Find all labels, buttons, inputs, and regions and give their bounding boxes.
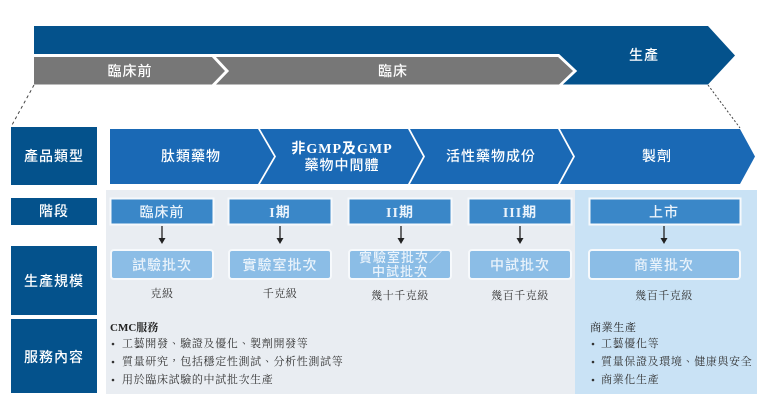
column: marketed bbox=[589, 198, 740, 302]
chevron: peptide drugs bbox=[110, 129, 274, 184]
clinical grey arrow bbox=[213, 57, 573, 84]
column: phase II bbox=[348, 198, 452, 302]
row label: stage bbox=[11, 198, 97, 225]
chevron: intermediates: 非GMP及GMP bbox=[291, 141, 393, 157]
column: phase III bbox=[468, 198, 572, 302]
chevron: formulation: 製劑 bbox=[642, 148, 672, 165]
dashed connector left bbox=[12, 85, 34, 125]
column: phase II: 中試批次 bbox=[372, 264, 428, 279]
panel: development stages background bbox=[106, 190, 575, 394]
white outline of clinical arrows bbox=[34, 56, 575, 86]
text block: CMC services bbox=[110, 320, 343, 386]
column: phase II: II期 bbox=[386, 205, 414, 221]
preclinical grey arrow: 臨床前 bbox=[108, 63, 152, 80]
chevron: peptide drugs: 肽類藥物 bbox=[161, 149, 221, 165]
row label: product type bbox=[11, 127, 97, 185]
column: preclinical bbox=[110, 198, 214, 300]
product type chevrons bbox=[110, 129, 755, 184]
row label: service content bbox=[11, 319, 97, 393]
column: phase II: 實驗室批次／ bbox=[359, 250, 443, 265]
row label: production scale bbox=[11, 246, 97, 315]
column: phase II: 幾十千克級 bbox=[371, 288, 429, 302]
row label: service content: 服務內容 bbox=[24, 349, 84, 366]
clinical grey arrow: 臨床 bbox=[378, 63, 408, 80]
text block: commercial production: 商業生產 bbox=[590, 320, 637, 334]
column: phase I: I期 bbox=[269, 205, 291, 221]
row label: production scale: 生產規模 bbox=[24, 273, 84, 290]
text block: CMC services: CMC服務 bbox=[110, 320, 158, 334]
column: phase I: 千克級 bbox=[263, 286, 297, 300]
column: marketed: 幾百千克級 bbox=[635, 288, 693, 302]
column: preclinical: 試驗批次 bbox=[132, 257, 192, 274]
column: marketed: 上市 bbox=[649, 204, 679, 221]
preclinical grey arrow bbox=[34, 57, 228, 84]
chevron: intermediates bbox=[260, 129, 423, 184]
panel: commercial background bbox=[575, 190, 757, 394]
row label: product type: 產品類型 bbox=[24, 148, 84, 165]
text block: commercial production: 商業化生產 bbox=[601, 372, 659, 386]
column: phase III: 幾百千克級 bbox=[491, 288, 549, 302]
chevron: intermediates: 藥物中間體 bbox=[304, 158, 380, 174]
chevron separator bbox=[213, 56, 227, 86]
column: preclinical: 臨床前 bbox=[140, 204, 184, 221]
row label: stage: 階段 bbox=[39, 204, 69, 220]
chevron: API: 活性藥物成份 bbox=[446, 149, 536, 165]
text block: commercial production: 質量保證及環境、健康與安全 bbox=[601, 354, 752, 368]
dashed connector right bbox=[708, 85, 740, 128]
column: marketed: 商業批次 bbox=[634, 258, 694, 274]
chevron: formulation bbox=[560, 129, 755, 184]
column: phase I bbox=[228, 198, 332, 300]
text block: CMC services: 質量研究，包括穩定性測試、分析性測試等 bbox=[122, 354, 343, 368]
text block: CMC services: 用於臨床試驗的中試批次生產 bbox=[122, 372, 273, 386]
text block: commercial production: 工藝優化等 bbox=[601, 336, 659, 350]
column: preclinical: 克級 bbox=[150, 286, 174, 300]
column: phase I: 實驗室批次 bbox=[242, 257, 318, 274]
text block: commercial production bbox=[590, 320, 752, 386]
column: phase III: 中試批次 bbox=[490, 258, 550, 274]
text block: CMC services: 工藝開發、驗證及優化、製劑開發等 bbox=[122, 336, 308, 350]
column: phase III: III期 bbox=[503, 205, 537, 221]
production arrow bbox=[34, 26, 735, 84]
production arrow: 生產 bbox=[629, 47, 659, 64]
chevron: API bbox=[410, 129, 573, 184]
